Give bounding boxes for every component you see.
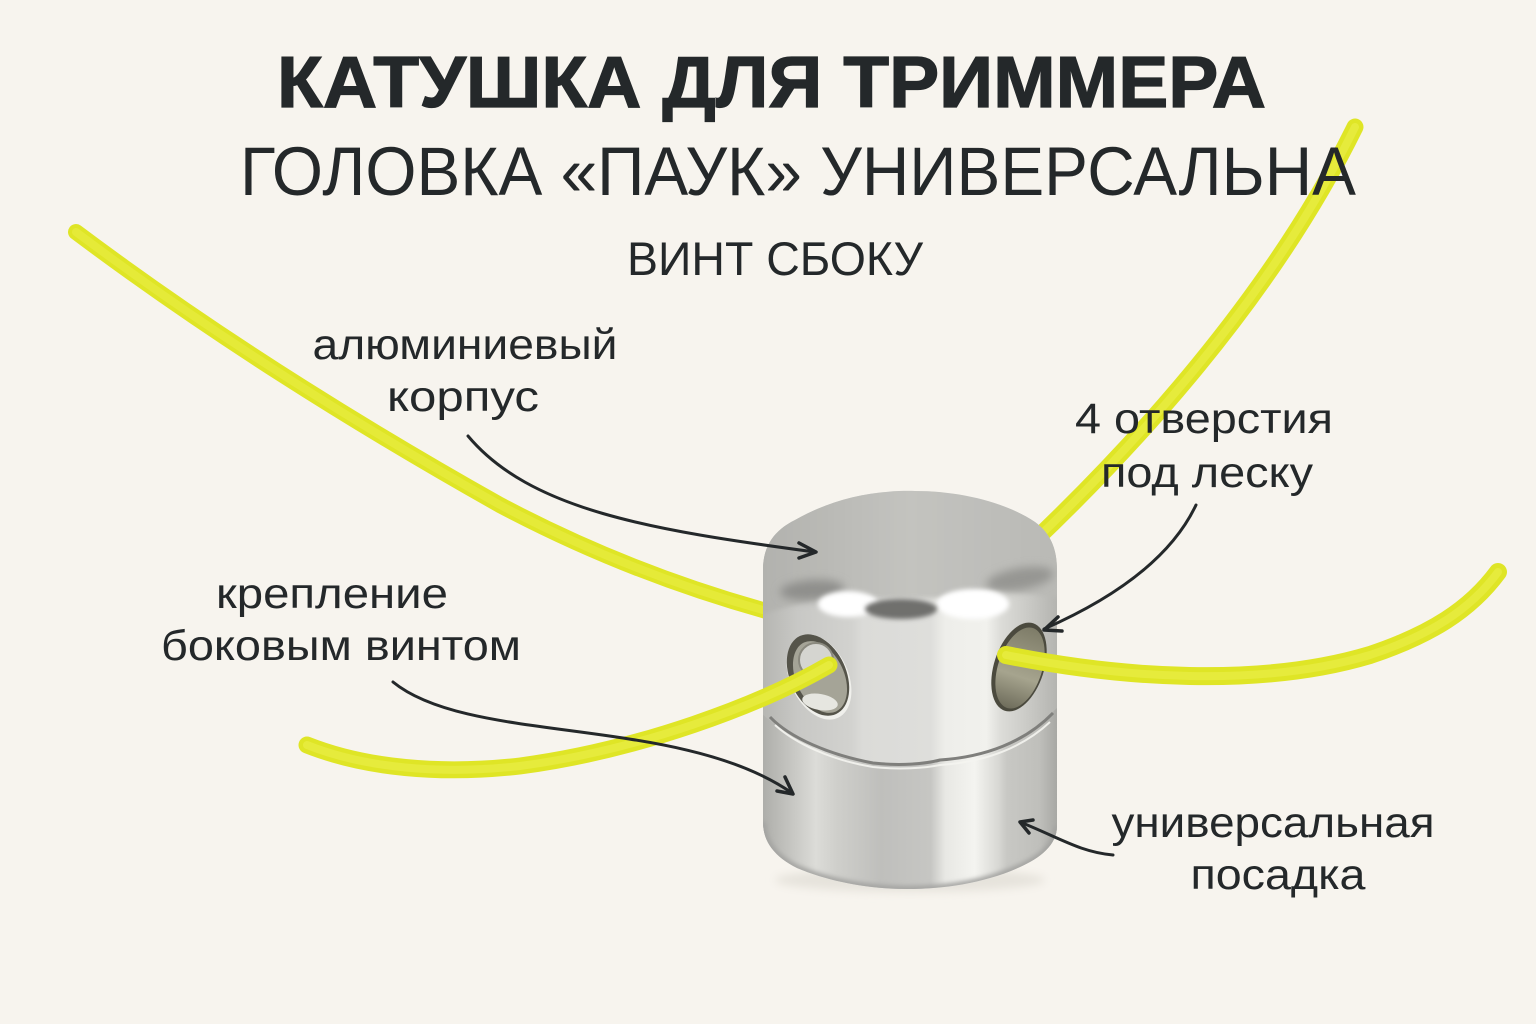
label: side screw mount: боковым винтом [161, 622, 521, 670]
lower ring [760, 705, 1060, 900]
dome surface [763, 490, 1057, 608]
metal body [763, 491, 1057, 889]
right hole [981, 616, 1057, 718]
trimmer line: upper left [76, 232, 770, 612]
arrow: to holes [1044, 505, 1196, 631]
label: four line holes: 4 отверстия [1075, 395, 1333, 443]
label: universal fit: универсальная [1112, 799, 1434, 847]
arrow: to housing [468, 436, 816, 558]
soft shadow [775, 868, 1045, 892]
subtitle: ГОЛОВКА «ПАУК» УНИВЕРСАЛЬНА [240, 133, 1356, 210]
arrow: to side mount [393, 682, 793, 794]
label: four line holes [1075, 395, 1333, 497]
label: universal fit [1112, 799, 1434, 899]
subheading: side screw: ВИНТ СБОКУ [627, 232, 924, 285]
arrow: to base [1020, 820, 1113, 855]
bottom edge shading [763, 822, 1057, 889]
label: side screw mount [161, 570, 521, 670]
trimmer line: upper right [1030, 127, 1355, 545]
trimmer line: right [1006, 572, 1498, 676]
body shading [763, 490, 1057, 889]
label: aluminium housing: корпус [387, 373, 539, 421]
title: КАТУШКА ДЛЯ ТРИММЕРА [277, 43, 1266, 123]
label: side screw mount: крепление [216, 570, 448, 618]
label: four line holes: под леску [1101, 449, 1314, 497]
label: aluminium housing [312, 321, 618, 421]
ring groove [770, 713, 1053, 764]
label: aluminium housing: алюминиевый [312, 321, 618, 369]
trimmer line: left [307, 665, 829, 770]
left hole [774, 624, 864, 730]
spool head [763, 490, 1057, 892]
label: universal fit: посадка [1190, 851, 1366, 899]
